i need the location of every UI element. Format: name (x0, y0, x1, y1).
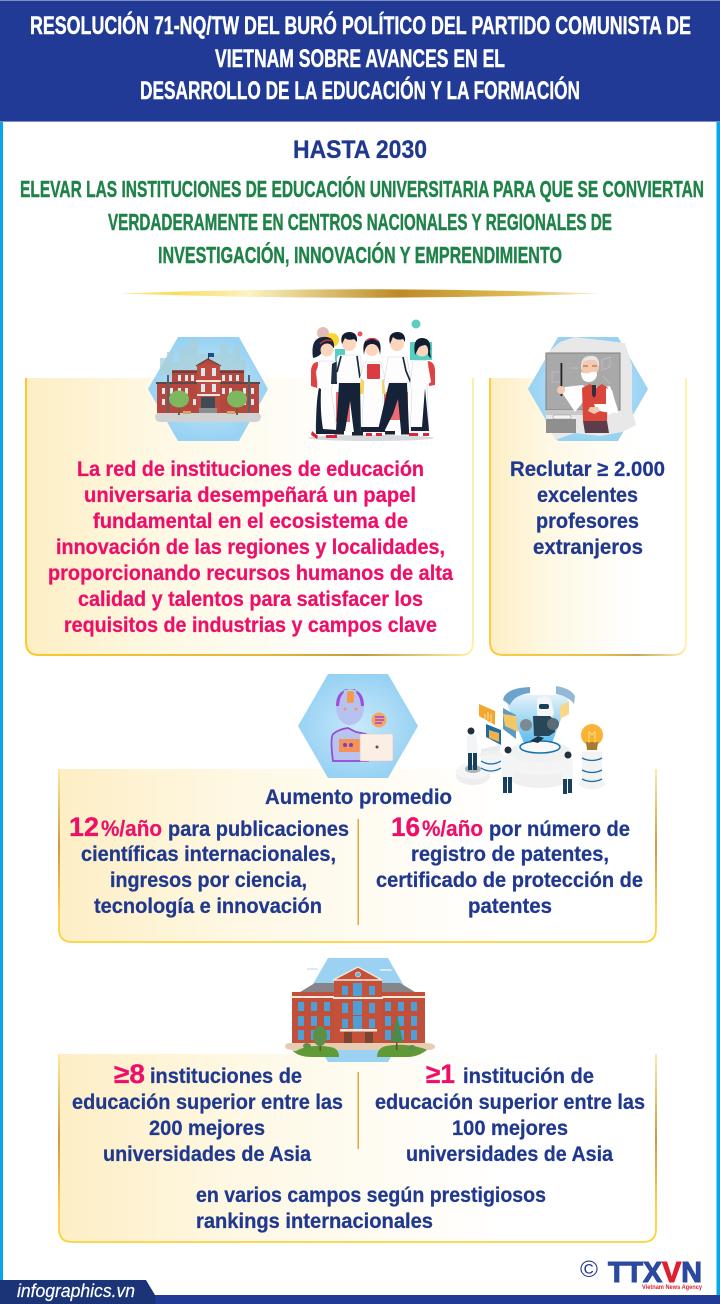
title: VIETNAM SOBRE AVANCES EN EL (215, 45, 505, 73)
text: network description: requisitos de industrias y campos clave (64, 614, 437, 637)
panel: foreign professors (490, 378, 686, 655)
subtitle: INVESTIGACIÓN, INNOVACIÓN Y EMPRENDIMIENTO (158, 241, 562, 268)
text: international rankings: en varios campos según prestigiosos (196, 1184, 546, 1207)
stat: 12 percent per year: científicas internacionales, (81, 843, 336, 866)
gold divider (119, 289, 601, 298)
title (30, 10, 691, 105)
stat: top 100 universities: 100 mejores (452, 1117, 568, 1140)
icon: university building on hexagon (285, 958, 435, 1062)
text: recruit professors: profesores (536, 510, 639, 533)
panel: university network (26, 378, 473, 655)
stat: 16 percent per year: registro de patentes, (411, 843, 609, 866)
agency wordmark: TTXVN (608, 1257, 702, 1289)
stat: top 100 universities: institución de (463, 1065, 594, 1088)
boy 1 (331, 332, 363, 436)
icon: school on hexagon (148, 337, 268, 441)
heading: average increase: Aumento promedio (265, 786, 452, 809)
footer bar (0, 1280, 720, 1304)
text: network description: universaria desempeñará un papel (84, 484, 416, 507)
title banner (0, 0, 720, 122)
icon: AI technology scene (456, 686, 605, 794)
icon: students in uniforms (308, 320, 435, 441)
stat: 16 percent per year: patentes (468, 895, 552, 918)
copyright symbol: © (580, 1256, 598, 1282)
text: network description: fundamental en el ecosistema de (93, 510, 408, 533)
text: recruit professors (510, 458, 665, 559)
icon: teacher on hexagon (528, 337, 648, 441)
stat: 12 percent per year: tecnología e innovación (94, 895, 322, 918)
footer site name: infographics.vn (17, 1281, 135, 1301)
text: international rankings (196, 1184, 546, 1233)
panel: university rankings (59, 1054, 656, 1242)
stat: top 200 universities (72, 1059, 343, 1166)
stat: top 200 universities: universidades de Asia (103, 1143, 311, 1166)
boy 2 (378, 332, 411, 434)
text: network description: proporcionando recursos humanos de alta (48, 562, 453, 585)
stat: 16 percent per year: certificado de protección de (376, 869, 643, 892)
girl 1 (311, 337, 337, 439)
girl 2 (360, 338, 385, 436)
logo: TTXVN (580, 1256, 702, 1291)
girl 3 (409, 338, 435, 436)
agency tagline: Vietnam News Agency (642, 1284, 702, 1291)
stat: 16 percent per year: por número de (489, 818, 630, 841)
icon: AI robot on hexagon (298, 674, 418, 778)
stat: 16 percent per year: %/año (422, 816, 483, 841)
panel: average increase (59, 769, 656, 942)
stat: 12 percent per year: para publicaciones (168, 818, 349, 841)
text: international rankings: rankings internacionales (196, 1210, 433, 1233)
stat: 16 percent per year (376, 812, 643, 918)
stat: top 100 universities: educación superior entre las (375, 1091, 645, 1114)
text: network description: innovación de las regiones y localidades, (56, 536, 445, 559)
stat: top 100 universities: universidades de Asia (406, 1143, 613, 1166)
text: network description: La red de instituciones de educación (77, 458, 424, 481)
stat: 12 percent per year: 12 (69, 812, 99, 842)
stat: 12 percent per year: ingresos por ciencia, (110, 869, 307, 892)
stat: 12 percent per year (69, 812, 349, 918)
text: recruit professors: extranjeros (533, 536, 643, 559)
stat: top 200 universities: instituciones de (150, 1065, 302, 1088)
text: network description (48, 458, 453, 637)
text: recruit professors: excelentes (537, 484, 638, 507)
stat: top 100 universities (375, 1059, 645, 1166)
subtitle (20, 175, 704, 268)
stat: 12 percent per year: %/año (101, 816, 162, 841)
text: network description: calidad y talentos para satisfacer los (78, 588, 423, 611)
stat: 16 percent per year: 16 (391, 812, 420, 842)
stat: top 200 universities: ≥8 (114, 1059, 145, 1089)
stat: top 200 universities: educación superior entre las (72, 1091, 343, 1114)
stat: top 100 universities: ≥1 (426, 1059, 455, 1089)
stat: top 200 universities: 200 mejores (149, 1117, 265, 1140)
text: recruit professors: Reclutar ≥ 2.000 (510, 458, 665, 481)
heading: hasta 2030: HASTA 2030 (293, 136, 427, 164)
